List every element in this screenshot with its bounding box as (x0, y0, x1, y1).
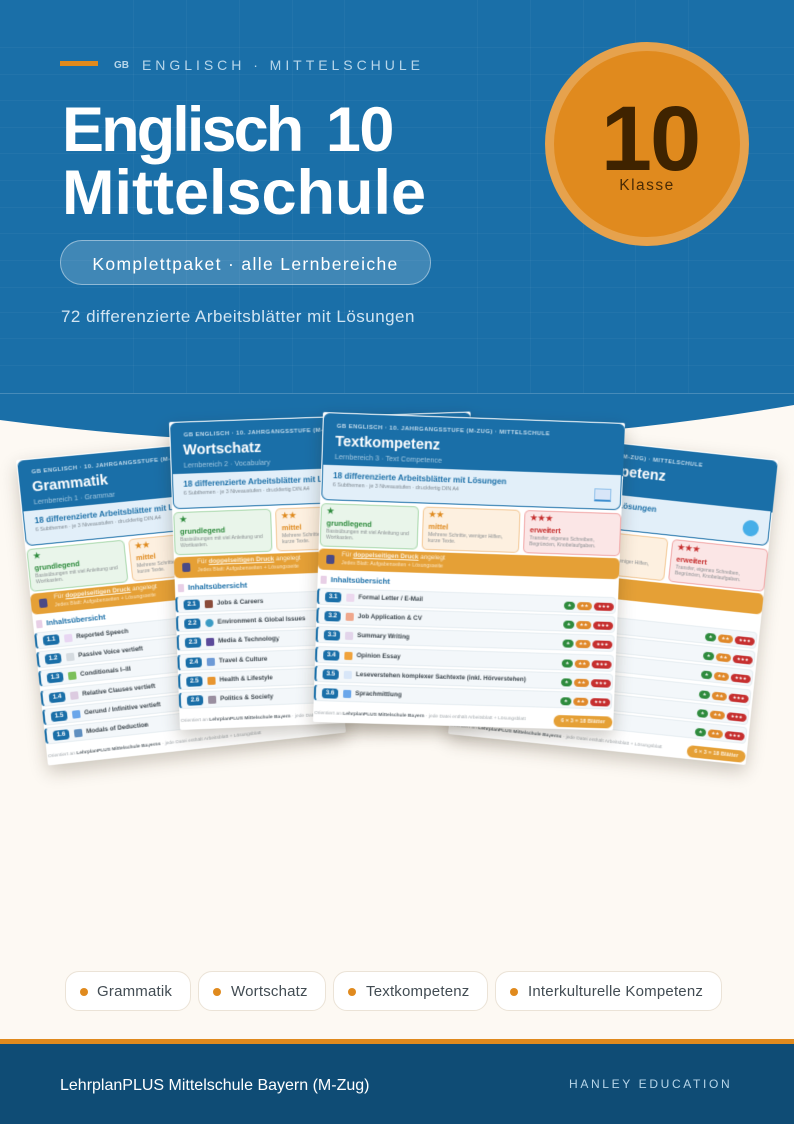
card header: GB ENGLISCH · 10. JAHRGANGSSTUFE (M-ZUG) · MITTELSCHULE (337, 424, 550, 437)
topic rows: Relative Clauses vertieft (82, 683, 156, 697)
sheet count pill (420, 704, 479, 718)
contents heading: Inhaltsübersicht (188, 581, 247, 592)
topic rows: Sprachmittlung (355, 690, 402, 699)
level: mittel: mittel (282, 523, 302, 532)
level: mittel: mittel (428, 522, 448, 532)
level: erweitert: erweitert (530, 525, 561, 535)
card header: GB ENGLISCH · 10. JAHRGANGSSTUFE (M-ZUG) · MITTELSCHULE (492, 440, 703, 469)
topic rows: Conditionals I–III (80, 666, 131, 678)
level: mittel: Mehrere Schritte, weniger Hilfen, kurze Texte. (428, 532, 503, 545)
level: grundlegend (173, 509, 272, 555)
eyebrow: GB (114, 60, 129, 71)
print banner: Jedes Blatt: Aufgabenseiten + Lösungsseite (54, 592, 156, 608)
topic rows: ★ (565, 660, 569, 665)
topic rows: 3.6 (326, 689, 335, 697)
card header: Lernbereich 1 · Grammar (33, 490, 115, 506)
topic rows: 2.1 (187, 601, 196, 608)
worksheet card: Wortschatz (169, 411, 480, 730)
topic rows: Environment & Global Issues (217, 615, 306, 626)
topic rows: ★★★ (594, 699, 606, 704)
topic rows (612, 618, 758, 744)
topic rows: ★★ (719, 654, 728, 660)
level: mittel: ★★ (429, 510, 444, 519)
level: erweitert: ★★★ (677, 543, 701, 554)
topic rows: ★★★ (595, 680, 607, 685)
level: mittel: mittel (136, 551, 156, 562)
topic rows: ★ (706, 653, 711, 658)
level: mittel: ★★ (281, 511, 297, 520)
topic rows: Modals of Deduction (86, 722, 149, 735)
level: mittel (275, 505, 374, 551)
topic rows: ★ (564, 698, 568, 703)
level: mittel: Mehrere Schritte, weniger Hilfen, kurze Texte. (137, 556, 211, 576)
chip: Wortschatz: Wortschatz (231, 983, 308, 1000)
topic rows: ★ (567, 603, 572, 608)
chip: Interkulturelle Kompetenz (495, 971, 722, 1011)
card header (17, 433, 320, 513)
topic rows: ★ (702, 691, 707, 697)
topic rows: ★ (708, 634, 713, 639)
card header: Interkulturelle Kompetenz (489, 450, 667, 485)
topic rows: 1.6 (56, 731, 66, 738)
chip: Interkulturelle Kompetenz: Interkulturelle Kompetenz (528, 983, 703, 1000)
level: mittel: mittel (576, 544, 596, 555)
level: grundlegend (26, 540, 128, 592)
topic rows: Health & Lifestyle (219, 674, 273, 683)
topic rows: Gerund / Infinitive vertieft (84, 701, 161, 716)
level: grundlegend: Basisübungen mit viel Anleitung und Wortkasten. (35, 565, 118, 586)
card footer: Orientiert an LehrplanPLUS Mittelschule Bayerns · jede Datei enthält Arbeitsblatt + Lösungsblatt (48, 731, 262, 759)
eyebrow: ENGLISCH · MITTELSCHULE (142, 57, 424, 73)
topic rows: ★ (698, 729, 703, 735)
topic rows: 2.5 (190, 677, 199, 684)
card header: Wortschatz (183, 440, 261, 459)
info box (172, 463, 472, 509)
topic rows: 3.2 (328, 612, 337, 620)
card header: Lernbereich 2 · Vocabulary (184, 458, 270, 470)
sheet count pill: 6 × 3 = 18 Blätter (694, 749, 738, 759)
topic rows: ★ (700, 710, 705, 716)
topic rows: ★★★ (598, 604, 610, 609)
level: grundlegend: grundlegend (34, 559, 80, 572)
topic rows: ★★ (580, 622, 588, 627)
topic rows: Formal Letter / E-Mail (358, 594, 423, 603)
card header: Textkompetenz (335, 434, 440, 454)
title: Englisch 10 (62, 95, 393, 165)
topic rows: 2.6 (191, 696, 200, 704)
print banner: Für doppelseitigen Druck angelegt (342, 551, 445, 562)
level: mittel (568, 528, 669, 581)
card header: Lernbereich 4 · Intercultural Competence (488, 468, 619, 491)
topic rows: ★★★ (732, 694, 745, 701)
level: grundlegend (320, 503, 419, 550)
topic rows: 1.2 (48, 655, 58, 662)
topic rows: ★ (567, 622, 571, 627)
topic rows: ★★ (711, 730, 720, 736)
card footer: Orientiert an LehrplanPLUS Mittelschule Bayerns · jede Datei enthält Arbeitsblatt + Lösungsblatt (450, 723, 662, 750)
print banner (30, 564, 331, 614)
topic rows: Reported Speech (76, 628, 129, 640)
topic rows: Leseverstehen komplexer Sachtexte (inkl. Hörverstehen) (356, 671, 526, 683)
chip: Textkompetenz (333, 971, 488, 1011)
level: erweitert (668, 539, 768, 592)
info box (472, 480, 772, 546)
level: grundlegend: grundlegend (326, 518, 372, 529)
topic rows: 3.5 (326, 670, 335, 677)
title (62, 95, 426, 228)
card footer: Orientiert an LehrplanPLUS Mittelschule Bayern · jede Datei enthält Arbeitsblatt + Lösungsblatt (314, 711, 526, 722)
chip: Textkompetenz: Textkompetenz (366, 983, 469, 1000)
card header (322, 413, 625, 476)
topic rows: 3.1 (329, 593, 338, 600)
print banner (174, 546, 475, 578)
topic rows: ★ (566, 641, 570, 646)
level: grundlegend: ★ (33, 551, 41, 561)
level: erweitert: ★★★ (530, 513, 553, 523)
topic rows: ★★ (577, 699, 585, 704)
topic rows: ★ (564, 679, 569, 684)
level: grundlegend: grundlegend (180, 525, 225, 536)
level: mittel: ★★ (577, 532, 593, 542)
sheet count pill: 6 × 3 = 18 Blätter (427, 707, 472, 715)
topic rows: Passive Voice vertieft (78, 646, 143, 659)
level: grundlegend: Basisübungen mit viel Anleitung und Wortkasten. (180, 534, 263, 549)
worksheet card: Interkulturelle Kompetenz (448, 428, 778, 765)
info box (321, 465, 622, 510)
topic rows: Opinion Essay (356, 652, 401, 660)
info box: 18 differenzierte Arbeitsblätter mit Lösungen (34, 500, 207, 525)
contents heading: Inhaltsübersicht (46, 612, 106, 627)
subtitle pill (60, 240, 431, 285)
info box: 18 differenzierte Arbeitsblätter mit Lösungen (333, 471, 507, 486)
worksheet card: Grammatik (16, 432, 346, 766)
chip: Grammatik (65, 971, 191, 1011)
topic rows: Job Application & CV (358, 613, 422, 622)
topic rows (34, 618, 181, 744)
topic rows: 2.2 (188, 620, 197, 627)
level: mittel (128, 530, 229, 582)
topic rows: ★★★ (734, 675, 747, 682)
level: erweitert: Transfer, eigenes Schreiben, Begründen, Knobelaufgaben. (674, 564, 741, 584)
subtitle pill: Komplettpaket · alle Lernbereiche (92, 254, 399, 274)
level: erweitert: Transfer, eigenes Schreiben, Begründen, Knobelaufgaben. (529, 535, 596, 550)
chip: Grammatik: Grammatik (97, 983, 172, 1000)
info box: 6 Subthemen · je 3 Niveaustufen · druckfertig DIN A4 (35, 515, 161, 533)
footer band (0, 1039, 794, 1124)
card footer: Orientiert an LehrplanPLUS Mittelschule Bayern · jede Datei enthält Arbeitsblatt + Lösungsblatt (181, 710, 392, 724)
sheet count pill: 6 × 3 = 18 Blätter (561, 718, 605, 725)
card header (475, 429, 778, 513)
topic rows: Media & Technology (218, 636, 279, 645)
orange accent bar (60, 61, 98, 66)
print banner (318, 548, 620, 579)
info box: 18 differenzierte Arbeitsblätter mit Lösungen (183, 474, 357, 489)
topic rows: 3.3 (327, 632, 336, 639)
info box: 6 Subthemen · je 3 Niveaustufen · druckfertig DIN A4 (333, 482, 459, 493)
chip: Wortschatz (198, 971, 326, 1011)
print banner: Für doppelseitigen Druck angelegt (197, 555, 301, 565)
topic rows (175, 591, 318, 709)
topic rows: 1.3 (50, 674, 60, 681)
topic rows: 1.1 (46, 636, 56, 643)
level: erweitert (523, 510, 621, 556)
icon: globe (742, 520, 759, 537)
level: grundlegend: ★ (179, 515, 187, 524)
topic rows: ★★ (580, 603, 589, 608)
topic rows: ★★★ (738, 637, 751, 644)
info box (22, 483, 323, 546)
card header: Grammatik (31, 472, 109, 495)
topic rows: 1.5 (54, 712, 64, 719)
sheet count pill (553, 715, 613, 728)
hero background (0, 0, 794, 438)
grade label: Klasse (619, 177, 675, 194)
topic rows: 1.4 (52, 693, 62, 700)
worksheet count: 72 differenzierte Arbeitsblätter mit Lösungen (61, 307, 415, 326)
icon: book (594, 488, 611, 502)
worksheet card: Textkompetenz (313, 412, 625, 731)
level: erweitert: erweitert (676, 554, 707, 567)
topic rows: ★ (704, 672, 709, 677)
card header: GB ENGLISCH · 10. JAHRGANGSSTUFE (M-ZUG) · MITTELSCHULE (31, 450, 244, 476)
publisher: HANLEY EDUCATION (569, 1077, 732, 1091)
sheet count pill (686, 745, 746, 763)
topic rows: ★★ (578, 660, 586, 666)
level: mittel: ★★ (134, 540, 151, 550)
card header: Lernbereich 3 · Text Competence (335, 452, 442, 465)
topic rows: 3.4 (327, 651, 336, 658)
info box: 18 differenzierte Arbeitsblätter mit Lösungen (485, 487, 657, 514)
topic rows: 2.3 (189, 639, 197, 646)
card header (170, 412, 472, 475)
info box: 6 Subthemen · je 3 Niveaustufen · druckfertig DIN A4 (484, 498, 609, 517)
topic rows: Jobs & Careers (217, 598, 263, 607)
level: mittel (422, 507, 521, 553)
grade number: 10 (601, 88, 699, 190)
contents heading: Inhaltsübersicht (331, 575, 390, 586)
level: mittel: Mehrere Schritte, weniger Hilfen, kurze Texte. (282, 530, 357, 546)
topic rows: Politics & Society (220, 693, 273, 702)
level: grundlegend: Basisübungen mit viel Anleitung und Wortkasten. (326, 528, 409, 542)
topic rows: ★★★ (595, 661, 608, 666)
topic rows: ★★ (577, 680, 586, 685)
topic rows: Summary Writing (357, 633, 410, 641)
topic rows: ★★★ (736, 656, 749, 663)
topic rows: ★★★ (597, 623, 609, 628)
print banner (464, 562, 764, 614)
card header: GB ENGLISCH · 10. JAHRGANGSSTUFE (M-ZUG) · MITTELSCHULE (184, 425, 397, 439)
topic rows: ★★ (579, 641, 587, 647)
topic rows: ★★ (717, 673, 726, 679)
topic rows: ★★ (713, 711, 722, 717)
curriculum note: LehrplanPLUS Mittelschule Bayern (M-Zug) (60, 1077, 369, 1094)
info box: 6 Subthemen · je 3 Niveaustufen · druckfertig DIN A4 (184, 486, 310, 497)
level: grundlegend: ★ (327, 506, 335, 516)
topic rows: Travel & Culture (219, 655, 268, 664)
print banner: Jedes Blatt: Aufgabenseiten + Lösungsseite (341, 560, 443, 569)
topic rows: ★★★ (730, 713, 743, 720)
topic rows (314, 588, 616, 710)
title: Mittelschule (62, 158, 426, 228)
topic rows: ★★★ (728, 732, 741, 738)
level: mittel: Mehrere Schritte, weniger Hilfen, kurze Texte. (574, 554, 649, 569)
print banner: Jedes Blatt: Aufgabenseiten + Lösungsseite (197, 563, 299, 573)
topic rows: ★★ (715, 692, 724, 698)
topic rows: ★★★ (596, 642, 609, 647)
grade badge (545, 42, 749, 246)
topic rows: 2.4 (189, 658, 198, 665)
topic rows: ★★ (721, 635, 730, 641)
print banner: Für doppelseitigen Druck angelegt (53, 583, 157, 601)
